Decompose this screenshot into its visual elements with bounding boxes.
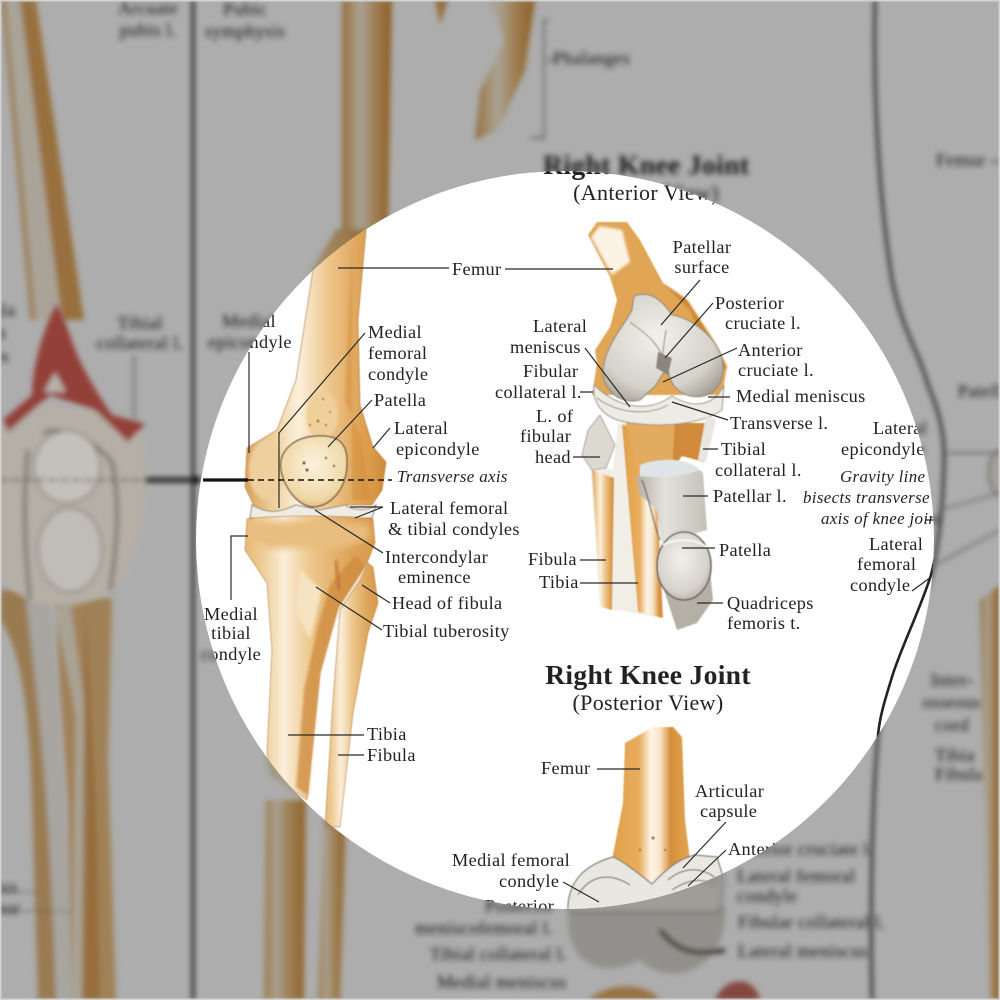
labels: front view: Lateral bbox=[394, 418, 448, 438]
labels: gravity line side: Gravity line bbox=[840, 467, 925, 486]
background labels, blurred: epicondyle bbox=[841, 439, 925, 459]
background labels, blurred: Lateral bbox=[873, 418, 927, 438]
gravity line bbox=[871, 0, 944, 1000]
illustration: right knee anterior flexed view bbox=[582, 222, 727, 630]
labels: gravity line side: epicondyle bbox=[841, 439, 925, 459]
illustration: right knee front view bbox=[245, 230, 386, 827]
labels: posterior view: condyle bbox=[499, 871, 559, 891]
labels: front view: tibial bbox=[211, 623, 251, 643]
background labels, blurred: (Anterior View) bbox=[573, 180, 719, 205]
labels: anterior view: Lateral bbox=[533, 316, 587, 336]
patellar ligament bbox=[637, 463, 707, 543]
title: anterior view bbox=[544, 171, 715, 205]
labels: anterior view: Posterior bbox=[715, 293, 784, 313]
labels: front view: Medial bbox=[204, 604, 258, 624]
labels: front view: Medial bbox=[368, 322, 422, 342]
labels: anterior view: cruciate l. bbox=[738, 360, 814, 380]
title: anterior view: Right Knee Joint bbox=[543, 149, 749, 180]
labels: front view: epicondyle bbox=[396, 439, 480, 459]
labels: posterior view: Anterior cruciate l. bbox=[728, 839, 874, 859]
background labels, blurred: condyle bbox=[201, 644, 261, 664]
labels: front view: Fibula bbox=[367, 745, 416, 765]
labels: gravity line side: Lateral bbox=[873, 418, 927, 438]
labels: anterior view: meniscus bbox=[510, 337, 581, 357]
labels: gravity line side bbox=[803, 418, 943, 595]
background labels, blurred: osseous bbox=[922, 692, 982, 712]
background labels, blurred: Tibial bbox=[117, 313, 163, 333]
labels: anterior view: Patellar bbox=[673, 237, 731, 257]
labels: anterior view: head bbox=[535, 447, 571, 467]
labels: front view: Tibial tuberosity bbox=[383, 621, 510, 641]
labels: anterior view: collateral l. bbox=[495, 382, 582, 402]
patella bbox=[657, 532, 711, 600]
labels: posterior view: capsule bbox=[700, 801, 757, 821]
title: posterior view bbox=[546, 665, 750, 715]
background labels, blurred: Fibula bbox=[935, 764, 984, 784]
labels: gravity line side: Lateral bbox=[869, 534, 923, 554]
labels: front view: femoral bbox=[368, 343, 427, 363]
menisci bbox=[594, 385, 724, 425]
labels: posterior view: Articular bbox=[695, 781, 764, 801]
fibular head ligament bbox=[582, 415, 615, 470]
title: anterior view: (Anterior View) bbox=[573, 180, 719, 205]
repeated anatomy, blurred bbox=[245, 230, 386, 827]
background labels, blurred: Right Knee Joint bbox=[543, 149, 750, 180]
labels: anterior view: Transverse l. bbox=[730, 413, 828, 433]
labels: front view: Transverse axis bbox=[397, 467, 508, 486]
labels: gravity line side: femoral bbox=[857, 554, 916, 574]
background labels, blurred: axis of knee joint bbox=[821, 509, 943, 528]
background labels, blurred: Medial meniscus bbox=[437, 972, 567, 992]
quadriceps tendon bbox=[663, 570, 713, 630]
labels: front view: Intercondylar bbox=[385, 547, 488, 567]
labels: front view: condyle bbox=[368, 364, 428, 384]
background labels, blurred: Fibular collateral l. bbox=[738, 912, 885, 932]
leader lines bbox=[231, 268, 935, 902]
labels: anterior view: cruciate l. bbox=[725, 313, 801, 333]
labels: anterior view: Medial meniscus bbox=[736, 386, 866, 406]
background labels, blurred: pubis l. bbox=[120, 20, 176, 40]
illustration: right knee posterior view bbox=[568, 727, 724, 912]
labels: posterior view: Medial femoral bbox=[452, 850, 570, 870]
labels: anterior view: Fibular bbox=[523, 361, 578, 381]
background labels, blurred: Medial bbox=[222, 311, 276, 331]
menisci bbox=[250, 505, 376, 518]
magnifier circle bbox=[196, 171, 934, 909]
patella bbox=[281, 436, 347, 507]
labels: anterior view: Tibial bbox=[721, 439, 766, 459]
labels: front view: epicondyle bbox=[208, 332, 292, 352]
background labels, blurred: Lateral meniscus bbox=[738, 941, 868, 961]
title: posterior view: (Posterior View) bbox=[572, 690, 724, 715]
background labels, blurred: Lateral femoral bbox=[737, 866, 855, 886]
labels: front view: condyle bbox=[201, 644, 261, 664]
condyles bbox=[603, 294, 723, 401]
background labels, blurred: Phalanges bbox=[553, 48, 630, 68]
femur bbox=[588, 222, 727, 395]
labels: gravity line side: condyle bbox=[850, 575, 910, 595]
background labels, blurred: condyle bbox=[737, 886, 797, 906]
labels: anterior view: L. of bbox=[536, 406, 574, 426]
labels: posterior view: Femur bbox=[541, 758, 590, 778]
labels: posterior view: Posterior bbox=[485, 896, 554, 916]
background labels, blurred: meniscofemoral l. bbox=[415, 918, 553, 938]
labels: anterior view: surface bbox=[674, 257, 730, 277]
labels: front view: Patella bbox=[374, 390, 426, 410]
labels: anterior view: fibular bbox=[520, 426, 571, 446]
background labels, blurred: Anterior cruciate l. bbox=[728, 839, 874, 859]
labels: gravity line side: axis of knee joint bbox=[821, 509, 943, 528]
background labels, blurred: bisects transverse bbox=[803, 488, 930, 507]
labels: anterior view: Quadriceps bbox=[727, 593, 814, 613]
labels: front view: & tibial condyles bbox=[388, 519, 520, 539]
labels: anterior view: collateral l. bbox=[715, 460, 802, 480]
tibia bbox=[245, 516, 375, 800]
labels: anterior view: Fibula bbox=[528, 549, 577, 569]
transverse axis bbox=[203, 478, 392, 482]
background labels, blurred: Posterior bbox=[485, 896, 554, 916]
background labels, blurred: Inter- bbox=[931, 670, 973, 690]
background labels, blurred: cord bbox=[935, 715, 969, 735]
background labels, blurred: Gravity line bbox=[840, 467, 925, 486]
labels: anterior view: Patella bbox=[719, 540, 771, 560]
labels: anterior view: Anterior bbox=[738, 340, 803, 360]
labels: posterior view bbox=[452, 762, 775, 909]
fibula bbox=[325, 563, 378, 827]
title: posterior view: Right Knee Joint bbox=[545, 659, 751, 690]
background labels, blurred: Tibial collateral l. bbox=[430, 944, 567, 964]
labels: anterior view bbox=[495, 237, 866, 633]
labels: front view: Head of fibula bbox=[392, 593, 502, 613]
labels: anterior view: femoris t. bbox=[727, 613, 801, 633]
background labels, blurred: Tibia bbox=[935, 745, 975, 765]
background knee joint with muscle bbox=[0, 304, 193, 606]
labels: anterior view: Patellar l. bbox=[713, 486, 787, 506]
background labels, blurred: epicondyle bbox=[208, 332, 292, 352]
labels: front view bbox=[201, 259, 520, 765]
labels: front view: Medial bbox=[222, 311, 276, 331]
labels: front view: Femur bbox=[452, 259, 501, 279]
labels: anterior view: Tibia bbox=[539, 572, 579, 592]
femur bbox=[245, 230, 386, 515]
labels: gravity line side: bisects transverse bbox=[803, 488, 930, 507]
background labels, blurred: symphysis bbox=[205, 21, 285, 41]
labels: front view: Lateral femoral bbox=[390, 498, 508, 518]
labels: front view: Tibia bbox=[367, 724, 407, 744]
lower leg bones bbox=[590, 423, 663, 617]
background labels, blurred: collateral l. bbox=[97, 333, 183, 353]
labels: front view: eminence bbox=[398, 567, 471, 587]
